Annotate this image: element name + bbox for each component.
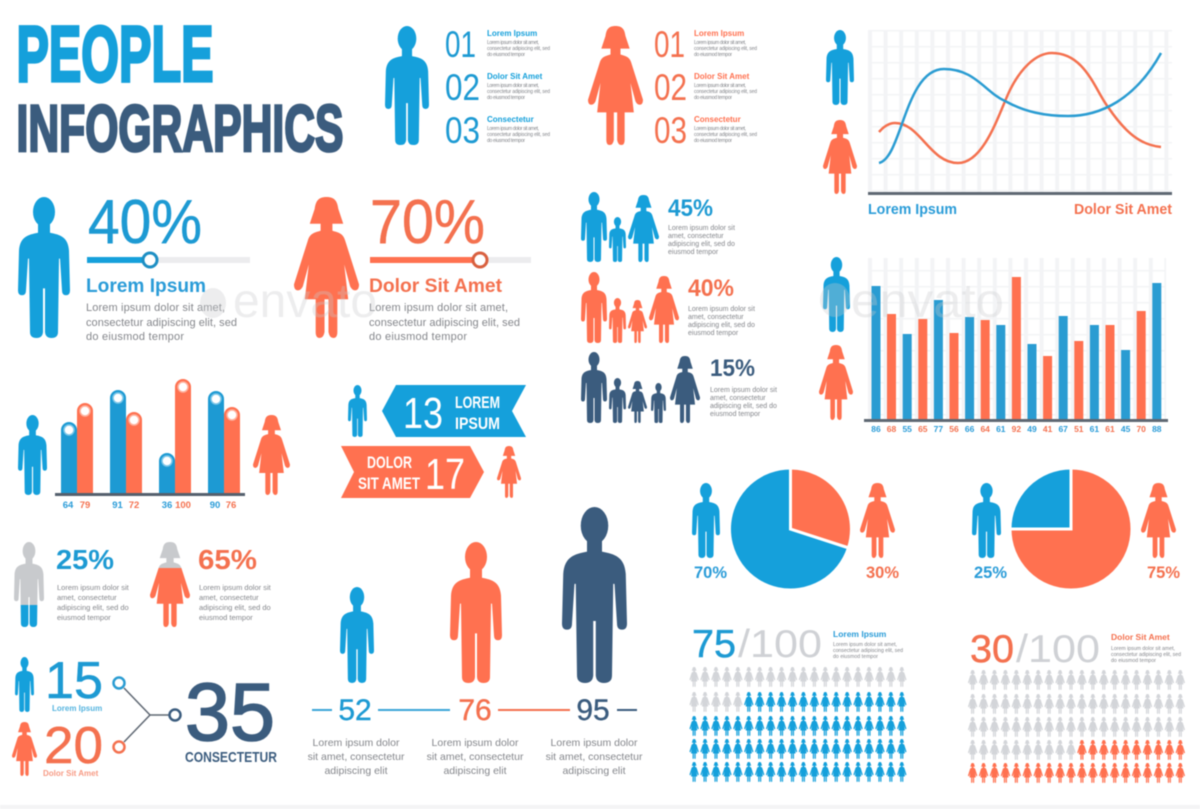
axis bbox=[55, 493, 245, 496]
description: eiusmod tempor bbox=[57, 613, 111, 622]
item 02 text: consectetur adipiscing elit, sed bbox=[694, 89, 757, 95]
value 65%: 65% bbox=[198, 544, 257, 575]
icon: woman bbox=[12, 722, 37, 776]
label: dolor sit amet: Dolor Sit Amet bbox=[1074, 202, 1172, 218]
value 70%: 70% bbox=[370, 188, 485, 257]
panel: pie 25/75 bbox=[972, 468, 1180, 590]
item 01 text: do eiusmod tempor bbox=[694, 52, 732, 58]
description 15%: adipiscing elit, sed do bbox=[710, 403, 777, 410]
icon: woman bbox=[1141, 483, 1176, 558]
bar values: 91 bbox=[112, 500, 123, 511]
item 02 text: consectetur adipiscing elit, sed bbox=[487, 89, 550, 95]
label and description: do eiusmod tempor bbox=[1111, 658, 1156, 664]
family 40 percent bbox=[581, 272, 679, 343]
description 15%: Lorem ipsum dolor sit bbox=[710, 387, 777, 394]
panel: pie 70/30 bbox=[692, 468, 899, 590]
panel: 75 of 100 bbox=[690, 623, 906, 782]
ribbon: orange: SIT AMET bbox=[358, 474, 420, 493]
item 01 text: Lorem Ipsum bbox=[694, 29, 744, 38]
description bbox=[199, 583, 272, 622]
bar values: 76 bbox=[226, 500, 236, 511]
item 02 text bbox=[694, 72, 757, 101]
bar values: 86 bbox=[871, 424, 881, 434]
icon: man bbox=[823, 257, 850, 332]
description 76: adipiscing elit bbox=[443, 765, 507, 777]
timeline connectors bbox=[312, 709, 637, 711]
description: consectetur adipiscing elit, sed bbox=[369, 317, 520, 329]
description: amet, consectetur bbox=[199, 593, 259, 602]
bar values: 70 bbox=[1136, 424, 1146, 434]
bar values: 65 bbox=[918, 424, 928, 434]
item 01 text: consectetur adipiscing elit, sed bbox=[487, 46, 550, 52]
pie chart bbox=[729, 468, 851, 590]
icon: woman bbox=[588, 26, 643, 145]
value 30: 30 bbox=[970, 628, 1014, 671]
description: do eiusmod tempor bbox=[369, 331, 467, 343]
family 15 percent bbox=[581, 352, 700, 423]
description 40%: eiusmod tempor bbox=[688, 330, 739, 337]
connector lines bbox=[114, 678, 180, 752]
watermark right: envato bbox=[851, 275, 1004, 328]
item 02 text: Lorem ipsum dolor sit amet, bbox=[694, 83, 746, 89]
icon: man bbox=[18, 415, 47, 495]
value 25%: 25% bbox=[56, 544, 114, 575]
description 40%: Lorem ipsum dolor sit bbox=[688, 306, 755, 313]
description: Lorem ipsum dolor sit amet, bbox=[369, 302, 508, 314]
bar values: 51 bbox=[1074, 424, 1084, 434]
label and description bbox=[833, 629, 903, 660]
people grid bbox=[968, 670, 1185, 783]
label: Lorem Ipsum bbox=[86, 276, 206, 297]
item 02 text: Lorem ipsum dolor sit amet, bbox=[487, 83, 539, 89]
description: adipiscing elit, sed do bbox=[199, 603, 271, 612]
panel: 40 percent man bbox=[18, 188, 250, 343]
label and description: Lorem ipsum dolor sit amet, bbox=[1111, 646, 1175, 652]
label and description: Lorem ipsum dolor sit amet, bbox=[833, 642, 897, 648]
item 03 text: Consectetur bbox=[694, 115, 741, 124]
value 75: 75 bbox=[692, 623, 736, 666]
icon: woman partially filled bbox=[150, 542, 190, 627]
item 03 text: Lorem ipsum dolor sit amet, bbox=[487, 126, 539, 132]
bar values: 88 bbox=[1152, 424, 1162, 434]
label: Dolor Sit Amet bbox=[369, 276, 503, 297]
panel: 70 percent woman bbox=[294, 188, 531, 343]
label dolor sit amet: Dolor Sit Amet bbox=[43, 769, 99, 778]
value 15%: 15% bbox=[710, 355, 755, 382]
label and description: consectetur adipiscing elit, sed bbox=[1111, 652, 1181, 658]
icon: woman bbox=[860, 483, 895, 558]
description 40% bbox=[688, 306, 755, 337]
value 95: 95 bbox=[576, 694, 610, 727]
progress slider bbox=[370, 253, 531, 267]
panel: ribbons bbox=[341, 385, 526, 499]
number 03: 03 bbox=[445, 110, 480, 151]
number 03: 03 bbox=[654, 110, 687, 151]
item 01 text bbox=[694, 29, 757, 58]
panel: line chart bbox=[823, 30, 1172, 218]
bar values: 77 bbox=[934, 424, 943, 434]
panel: female numbered list bbox=[588, 24, 757, 151]
description 52: adipiscing elit bbox=[324, 765, 388, 777]
panel: male numbered list bbox=[385, 24, 550, 151]
item 03 text: consectetur adipiscing elit, sed bbox=[694, 132, 757, 138]
bar values: 61 bbox=[1105, 424, 1115, 434]
bar values: 61 bbox=[996, 424, 1006, 434]
ribbon: orange: DOLOR bbox=[367, 453, 412, 472]
description: Lorem ipsum dolor sit amet, bbox=[86, 302, 225, 314]
item 03 text: consectetur adipiscing elit, sed bbox=[487, 132, 550, 138]
bar values bbox=[871, 424, 1162, 434]
ribbon: blue bbox=[382, 385, 526, 438]
description: consectetur adipiscing elit, sed bbox=[86, 317, 237, 329]
item 01 text: Lorem ipsum dolor sit amet, bbox=[487, 40, 539, 46]
description 15%: amet, consectetur bbox=[710, 395, 766, 402]
family 45 percent bbox=[581, 192, 659, 262]
item 02 text: Dolor Sit Amet bbox=[694, 72, 750, 81]
label and description: Dolor Sit Amet bbox=[1111, 632, 1170, 642]
bar values: 72 bbox=[129, 500, 139, 511]
description 15% bbox=[710, 387, 777, 418]
bar values: 79 bbox=[80, 500, 90, 511]
description 45% bbox=[668, 225, 735, 256]
icon: woman bbox=[823, 120, 857, 194]
value 40%: 40% bbox=[88, 188, 202, 257]
item 03 text bbox=[694, 115, 757, 144]
ribbon: orange bbox=[341, 446, 484, 499]
icon: woman bbox=[253, 415, 290, 495]
bar values bbox=[63, 500, 236, 511]
item 03 text bbox=[487, 115, 550, 144]
item 02 text: Dolor Sit Amet bbox=[487, 72, 543, 81]
icon: woman bbox=[819, 345, 853, 420]
item 03 text: Lorem ipsum dolor sit amet, bbox=[694, 126, 746, 132]
bar values: 56 bbox=[949, 424, 959, 434]
description 76: sit amet, consectetur bbox=[427, 751, 524, 763]
value 45%: 45% bbox=[668, 195, 713, 222]
bar values: 45 bbox=[1121, 424, 1131, 434]
title line: people: PEOPLE bbox=[16, 9, 214, 98]
description 40%: adipiscing elit, sed do bbox=[688, 322, 755, 329]
icon: man bbox=[18, 197, 70, 338]
panel: families bbox=[581, 192, 777, 423]
axis bbox=[868, 192, 1172, 195]
item 01 text: do eiusmod tempor bbox=[487, 52, 525, 58]
icon: man bbox=[826, 30, 854, 105]
value 40%: 40% bbox=[688, 275, 734, 302]
description 45%: amet, consectetur bbox=[668, 233, 724, 240]
item 02 text: do eiusmod tempor bbox=[694, 95, 732, 101]
description 52 bbox=[308, 737, 405, 777]
description: do eiusmod tempor bbox=[86, 331, 184, 343]
description 15%: eiusmod tempor bbox=[710, 411, 761, 418]
value out of 100: /100 bbox=[738, 623, 822, 666]
bar values: 90 bbox=[210, 500, 220, 511]
icon: woman bbox=[497, 446, 521, 498]
number 02: 02 bbox=[445, 67, 480, 108]
description 76: Lorem ipsum dolor bbox=[432, 737, 519, 749]
description 95: adipiscing elit bbox=[562, 765, 626, 777]
value 52: 52 bbox=[338, 694, 372, 727]
item 01 text: Lorem Ipsum bbox=[487, 29, 537, 38]
value out of 100: /100 bbox=[1016, 628, 1100, 671]
chart bars bbox=[61, 379, 240, 494]
total 35: 35 bbox=[185, 667, 275, 758]
item 01 text: consectetur adipiscing elit, sed bbox=[694, 46, 757, 52]
item 03 text: Consectetur bbox=[487, 115, 534, 124]
title line: infographics: INFOGRAPHICS bbox=[16, 91, 344, 165]
item 02 text bbox=[487, 72, 550, 101]
label 70%: 70% bbox=[694, 564, 727, 582]
bar values: 49 bbox=[1027, 424, 1037, 434]
number 01: 01 bbox=[654, 24, 685, 65]
line: woman series bbox=[879, 53, 1161, 163]
label and description: do eiusmod tempor bbox=[833, 654, 878, 660]
bar values: 41 bbox=[1043, 424, 1053, 434]
ribbon: blue: 13 bbox=[403, 389, 443, 438]
icon: tall man bbox=[562, 507, 627, 683]
description 52: Lorem ipsum dolor bbox=[313, 737, 400, 749]
icon: man bbox=[15, 657, 34, 712]
description: amet, consectetur bbox=[57, 593, 117, 602]
bottom strip bbox=[0, 805, 1200, 809]
icon: woman bbox=[294, 197, 359, 338]
item 01 text: Lorem ipsum dolor sit amet, bbox=[694, 40, 746, 46]
line: man series bbox=[879, 53, 1161, 163]
progress slider bbox=[87, 253, 250, 267]
icon: man bbox=[692, 483, 720, 558]
bar values: 64 bbox=[980, 424, 990, 434]
label lorem ipsum: Lorem Ipsum bbox=[52, 704, 102, 713]
number 01: 01 bbox=[445, 24, 476, 65]
description 45%: eiusmod tempor bbox=[668, 249, 719, 256]
ribbon: blue: IPSUM bbox=[455, 414, 500, 433]
bar values: 55 bbox=[902, 424, 912, 434]
people grid bbox=[690, 667, 906, 782]
panel: 30 of 100 bbox=[968, 628, 1185, 783]
description: Lorem ipsum dolor sit bbox=[199, 583, 272, 592]
description 95: sit amet, consectetur bbox=[546, 751, 643, 763]
label consectetur: CONSECTETUR bbox=[185, 749, 277, 766]
bar values: 61 bbox=[1090, 424, 1099, 434]
pie chart bbox=[1010, 468, 1132, 590]
panel: 25 percent man bbox=[14, 542, 130, 627]
icon: medium man bbox=[450, 542, 502, 683]
bar values: 67 bbox=[1058, 424, 1068, 434]
ribbon: blue: LOREM bbox=[455, 393, 500, 412]
label 30%: 30% bbox=[866, 564, 899, 582]
bar values: 36 bbox=[162, 500, 172, 511]
panel: small rounded bar chart bbox=[18, 379, 290, 511]
description: adipiscing elit, sed do bbox=[57, 603, 129, 612]
label and description: Lorem Ipsum bbox=[833, 629, 887, 639]
value 15: 15 bbox=[45, 652, 103, 710]
item 01 text bbox=[487, 29, 550, 58]
title bbox=[16, 9, 344, 165]
watermark left: envato bbox=[233, 275, 377, 328]
icon: man bbox=[972, 483, 1001, 558]
description 45%: adipiscing elit, sed do bbox=[668, 241, 735, 248]
bar values: 64 bbox=[63, 500, 74, 511]
description bbox=[86, 302, 237, 343]
description 52: sit amet, consectetur bbox=[308, 751, 405, 763]
description 95: Lorem ipsum dolor bbox=[551, 737, 638, 749]
panel: sum diagram bbox=[12, 652, 277, 778]
description 45%: Lorem ipsum dolor sit bbox=[668, 225, 735, 232]
description bbox=[369, 302, 520, 343]
icon: man bbox=[348, 385, 367, 437]
label 25%: 25% bbox=[974, 564, 1007, 582]
icon: small man bbox=[340, 587, 374, 683]
ribbon: orange: 17 bbox=[425, 450, 465, 499]
description: Lorem ipsum dolor sit bbox=[57, 583, 130, 592]
item 03 text: do eiusmod tempor bbox=[487, 138, 525, 144]
panel: height comparison bbox=[308, 507, 643, 777]
label: lorem ipsum: Lorem Ipsum bbox=[868, 202, 957, 218]
axis bbox=[864, 419, 1168, 422]
value 76: 76 bbox=[458, 694, 492, 727]
description 40%: amet, consectetur bbox=[688, 314, 744, 321]
description bbox=[57, 583, 130, 622]
label and description bbox=[1111, 632, 1181, 664]
panel: 65 percent woman bbox=[150, 542, 272, 627]
bar values: 100 bbox=[175, 500, 191, 511]
icon: man bbox=[385, 26, 429, 145]
item 03 text: do eiusmod tempor bbox=[694, 138, 732, 144]
label and description: consectetur adipiscing elit, sed bbox=[833, 648, 903, 654]
description 76 bbox=[427, 737, 524, 777]
item 02 text: do eiusmod tempor bbox=[487, 95, 525, 101]
bar values: 92 bbox=[1012, 424, 1021, 434]
value 20: 20 bbox=[44, 717, 103, 775]
label 75%: 75% bbox=[1147, 564, 1180, 582]
number 02: 02 bbox=[654, 67, 687, 108]
icon: man partially filled bbox=[14, 542, 44, 627]
description 95 bbox=[546, 737, 643, 777]
bar values: 68 bbox=[887, 424, 896, 434]
panel: large bar chart bbox=[819, 257, 1168, 434]
bar values: 66 bbox=[965, 424, 975, 434]
bars bbox=[872, 277, 1161, 420]
description: eiusmod tempor bbox=[199, 613, 253, 622]
